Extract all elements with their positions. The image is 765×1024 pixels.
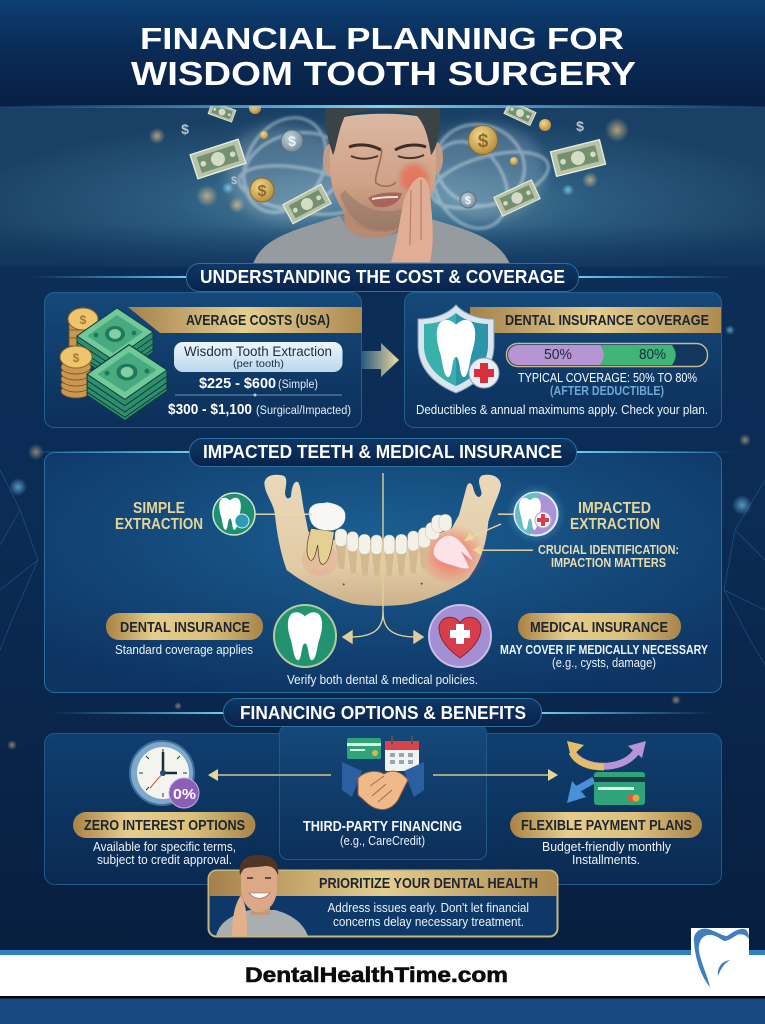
medical insurance label: (e.g., cysts, damage)	[552, 655, 656, 670]
flying bills	[190, 139, 246, 179]
nerve dots	[343, 583, 345, 585]
icon: clock with zero percent	[130, 741, 199, 808]
zero interest option	[73, 812, 256, 867]
dental insurance label: Standard coverage applies	[115, 642, 253, 657]
coverage bar	[506, 344, 708, 366]
icon: money stacks and coins: $	[80, 313, 87, 327]
crucial identification callout: IMPACTION MATTERS	[551, 555, 666, 570]
simple extraction label	[115, 500, 203, 533]
panel: dental insurance coverage: 50%	[544, 347, 572, 363]
callout: prioritize your dental health: concerns delay necessary treatment.	[333, 914, 524, 929]
icon: dental tooth	[274, 605, 336, 667]
hero illustration: man with toothache and swirling money: $	[181, 121, 189, 137]
simple extraction label: EXTRACTION	[115, 516, 203, 533]
hero illustration: man with toothache and swirling money: $	[288, 133, 296, 149]
hero illustration: man with toothache and swirling money: $	[258, 183, 267, 200]
panel: dental insurance coverage	[404, 292, 722, 428]
arrow: left	[208, 769, 331, 781]
third party financing	[303, 818, 462, 848]
icon: handshake with card and calendar	[342, 736, 424, 810]
callout heading: PRIORITIZE YOUR DENTAL HEALTH	[319, 875, 538, 892]
lower teeth crowns	[335, 514, 452, 554]
coverage note: TYPICAL COVERAGE: 50% TO 80%	[518, 371, 697, 385]
swirls	[225, 124, 545, 220]
jaw illustration	[264, 475, 501, 606]
crucial identification callout	[464, 524, 679, 570]
callout text: Address issues early. Don't let financial	[328, 900, 529, 915]
third party financing: THIRD-PARTY FINANCING	[303, 818, 462, 835]
panel: financing options and benefits	[44, 698, 722, 884]
panel: dental insurance coverage: DENTAL INSURANCE COVERAGE	[505, 312, 709, 329]
title: WISDOM TOOTH SURGERY	[131, 55, 636, 92]
heading band	[470, 307, 721, 333]
impacted tooth	[433, 535, 473, 569]
icon: money stacks and coins: $	[73, 351, 80, 365]
third party financing: (e.g., CareCredit)	[340, 833, 425, 848]
shirt	[253, 216, 510, 264]
medical insurance label: MEDICAL INSURANCE	[530, 619, 668, 636]
panel: dental insurance coverage: (AFTER DEDUCTIBLE)	[550, 384, 664, 398]
lower teeth roots	[336, 545, 430, 576]
verify note: Verify both dental & medical policies.	[287, 672, 478, 687]
simple extraction label: SIMPLE	[133, 500, 185, 517]
panel: average costs: (per tooth)	[233, 359, 284, 370]
medical insurance label	[500, 613, 708, 670]
title header band	[0, 0, 765, 108]
section heading: understanding the cost and coverage: UNDERSTANDING THE COST & COVERAGE	[200, 267, 565, 287]
panel: impacted teeth and medical insurance	[30, 438, 736, 692]
ears	[323, 144, 337, 176]
icon: clock with zero percent: 0%	[173, 786, 196, 803]
icon: simple extraction	[213, 493, 312, 535]
pain glow	[400, 164, 428, 192]
section heading: IMPACTED TEETH & MEDICAL INSURANCE	[203, 442, 562, 462]
callout: prioritize your dental health	[208, 855, 558, 936]
smiling man	[216, 855, 308, 936]
coins	[250, 178, 274, 202]
icon: flexible payment arrows and card	[567, 741, 646, 805]
arrow: costs to coverage	[362, 343, 399, 377]
hero illustration: man with toothache and swirling money: $	[478, 131, 489, 152]
section heading	[30, 438, 736, 466]
simple price: $225 - $600	[199, 375, 276, 392]
icon: medical heart	[429, 605, 491, 667]
flexible payment plans	[510, 812, 702, 867]
simple extraction tooth	[307, 528, 334, 564]
hero illustration: man with toothache and swirling money: $	[576, 118, 584, 134]
section heading: understanding the cost and coverage	[30, 264, 735, 292]
crucial identification callout: CRUCIAL IDENTIFICATION:	[538, 542, 679, 557]
panel: average costs: AVERAGE COSTS (USA)	[186, 312, 330, 329]
face	[330, 114, 436, 232]
impacted extraction icon	[498, 484, 566, 544]
title	[131, 21, 636, 92]
website: DentalHealthTime.com	[245, 964, 508, 987]
zero interest option: subject to credit approval.	[97, 852, 232, 867]
section heading	[50, 698, 715, 726]
logo: tooth outline	[691, 928, 749, 987]
dental insurance label: DENTAL INSURANCE	[120, 619, 250, 636]
panel: average costs: Wisdom Tooth Extraction	[184, 344, 332, 359]
background network and sparkles	[0, 325, 765, 750]
surgical price: $300 - $1,100	[168, 401, 252, 418]
footer band	[0, 950, 765, 1024]
hero illustration: man with toothache and swirling money	[0, 100, 765, 270]
hero illustration: man with toothache and swirling money: $	[465, 195, 471, 207]
centre card	[280, 726, 486, 860]
arrow: right	[433, 769, 558, 781]
flexible payment plans: Budget-friendly monthly	[542, 839, 671, 854]
panel: dental insurance coverage: 80%	[639, 347, 666, 363]
zero interest option: Available for specific terms,	[93, 839, 236, 854]
impacted extraction label: EXTRACTION	[570, 516, 660, 533]
zero interest option: ZERO INTEREST OPTIONS	[84, 817, 245, 834]
neck	[342, 190, 405, 238]
icon: money stacks and coins	[60, 308, 167, 420]
dental insurance label	[106, 613, 263, 657]
panel: dental insurance coverage: Deductibles & annual maximums apply. Check your plan.	[416, 402, 708, 417]
flexible payment plans: FLEXIBLE PAYMENT PLANS	[521, 817, 692, 834]
icon: shield with tooth	[418, 305, 499, 393]
panel: average costs: (Surgical/Impacted)	[256, 405, 351, 417]
panel: average costs: (Simple)	[278, 379, 318, 391]
impacted extraction label	[570, 500, 660, 533]
flexible payment plans: Installments.	[572, 852, 640, 867]
title: FINANCIAL PLANNING FOR	[140, 21, 624, 56]
section heading: FINANCING OPTIONS & BENEFITS	[240, 703, 526, 723]
impacted extraction label: IMPACTED	[578, 500, 651, 517]
heading band	[128, 307, 362, 333]
medical insurance label: MAY COVER IF MEDICALLY NECESSARY	[500, 642, 708, 657]
hand	[391, 177, 433, 262]
centre divider and split arrows	[343, 473, 423, 643]
hair	[325, 108, 440, 155]
panel: average costs	[44, 292, 362, 428]
brows and eyes	[349, 145, 426, 150]
hero illustration: man with toothache and swirling money: $	[231, 175, 237, 187]
label pill	[174, 342, 342, 372]
nose and mouth	[376, 150, 396, 186]
